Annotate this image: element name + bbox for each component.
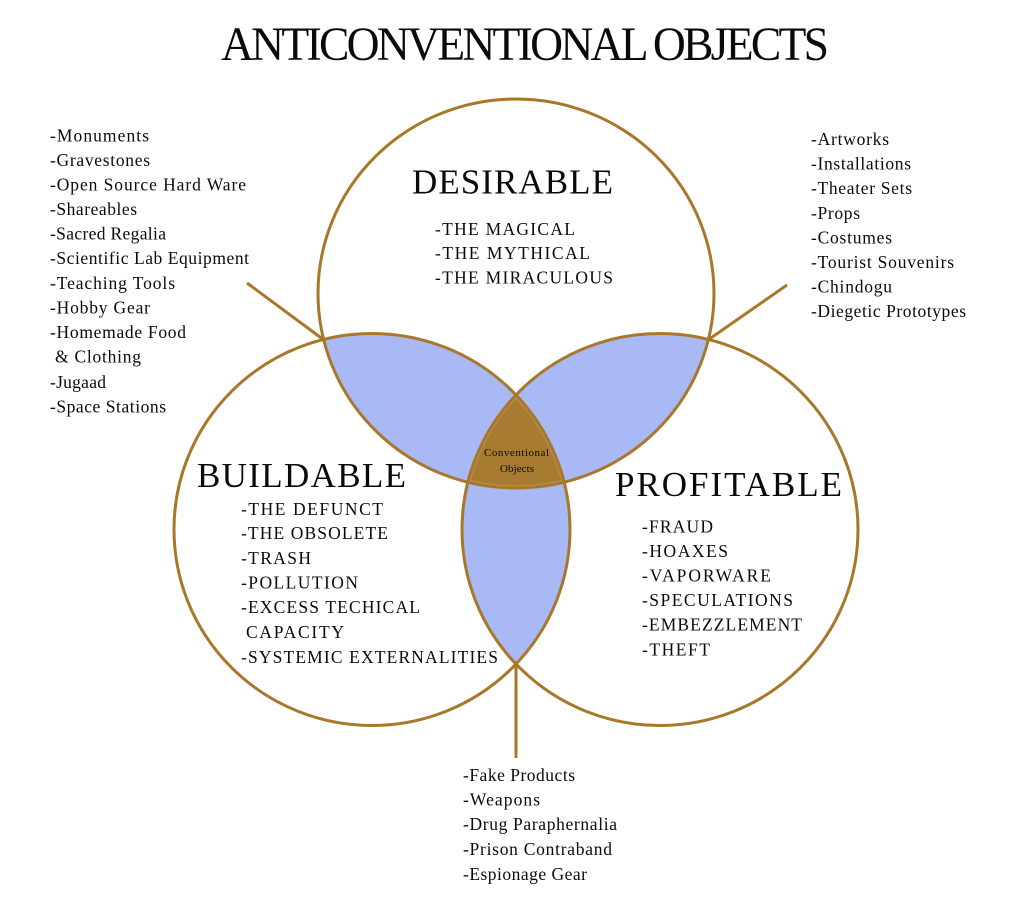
list: desirable and buildable examples: -Space Stations [50,396,166,416]
list: buildable: -SYSTEMIC EXTERNALITIES [241,647,498,667]
list: buildable: -EXCESS TECHICAL [241,597,420,617]
list: desirable and profitable examples: -Theater Sets [811,178,912,198]
list: desirable and buildable examples: & Clothing [55,346,141,366]
circle: profitable [462,334,858,726]
title: ANTICONVENTIONAL OBJECTS [221,18,829,71]
heading: buildable: BUILDABLE [197,456,406,495]
list: desirable and buildable examples: -Sacred Regalia [50,224,166,244]
list: desirable: -THE MYTHICAL [435,243,590,263]
list: desirable and profitable examples: -Props [811,203,860,223]
list: desirable and profitable examples: -Artworks [811,129,889,149]
list: desirable and profitable examples: -Diegetic Prototypes [811,301,966,321]
list: profitable: -HOAXES [642,541,728,561]
list: buildable: -THE OBSOLETE [241,523,388,543]
list: buildable and profitable examples: -Fake Products [463,765,575,785]
list: desirable and profitable examples: -Chindogu [811,276,892,296]
list: desirable and profitable examples: -Costumes [811,228,892,248]
list: buildable and profitable examples [463,765,617,884]
list: profitable: -VAPORWARE [642,566,771,586]
center label: Objects [500,463,534,475]
center label [484,447,549,475]
connector: buildable and profitable [514,662,518,758]
list: desirable and profitable examples: -Tourist Souvenirs [811,252,954,272]
heading: desirable: DESIRABLE [412,162,613,202]
list: buildable and profitable examples: -Weapons [463,790,540,810]
list: buildable and profitable examples: -Drug Paraphernalia [463,814,617,834]
list: desirable and buildable examples: -Teaching Tools [50,273,175,293]
list: desirable and buildable examples [50,126,249,416]
overlap: conventional objects [470,397,562,486]
venn diagram [174,99,858,726]
list: desirable and profitable examples [811,129,966,321]
overlap: desirable and profitable [518,335,706,480]
list: buildable: -TRASH [241,548,311,568]
list: buildable: -THE DEFUNCT [241,499,383,519]
list: desirable and buildable examples: -Hobby Gear [50,298,150,318]
list: buildable: -POLLUTION [241,572,358,592]
list: buildable [241,499,498,667]
panel: buildable [197,456,498,667]
list: profitable [642,516,802,660]
overlap: buildable and profitable [464,484,568,662]
connector: desirable and buildable [247,283,324,340]
list: desirable and buildable examples: -Monuments [50,126,149,146]
list: profitable: -SPECULATIONS [642,590,793,610]
list: buildable: CAPACITY [246,622,344,642]
list: desirable and buildable examples: -Jugaad [50,372,106,392]
panel: profitable [615,465,842,660]
list: desirable and profitable examples: -Installations [811,154,911,174]
list: desirable and buildable examples: -Homemade Food [50,322,186,342]
list: desirable: -THE MIRACULOUS [435,268,613,288]
list: profitable: -EMBEZZLEMENT [642,614,802,634]
center label: Conventional [484,447,549,459]
list: desirable and buildable examples: -Shareables [50,199,137,219]
list: buildable and profitable examples: -Espionage Gear [463,864,587,884]
list: profitable: -THEFT [642,640,710,660]
list: desirable and buildable examples: -Scientific Lab Equipment [50,248,249,268]
list: profitable: -FRAUD [642,516,713,536]
connector: desirable and profitable [708,285,787,340]
list: desirable and buildable examples: -Open Source Hard Ware [50,174,246,194]
circle: desirable [318,99,714,488]
circle: buildable [174,334,570,726]
heading: profitable: PROFITABLE [615,465,842,504]
panel: desirable [412,162,613,288]
list: desirable [435,219,613,288]
list: desirable: -THE MAGICAL [435,219,575,239]
list: buildable and profitable examples: -Prison Contraband [463,839,612,859]
list: desirable and buildable examples: -Gravestones [50,150,150,170]
overlap: desirable and buildable [326,335,514,480]
